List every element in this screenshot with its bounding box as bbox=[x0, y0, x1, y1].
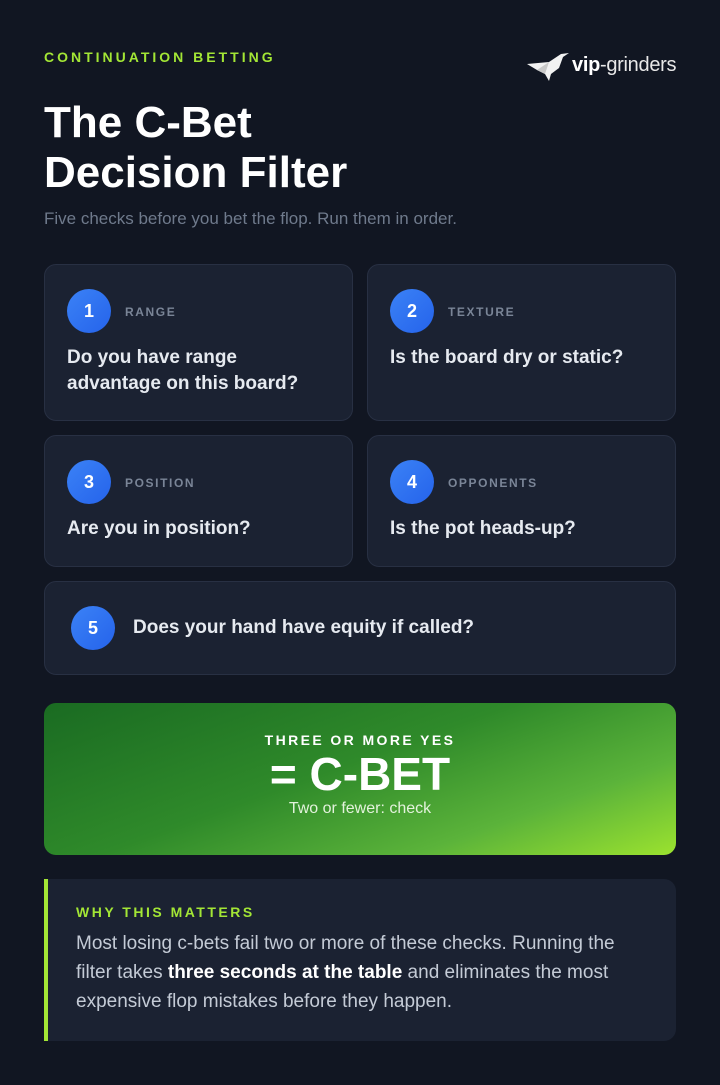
card 5: Does your hand have equity if called? bbox=[133, 617, 474, 638]
card 4: OPPONENTS bbox=[448, 476, 538, 490]
card 5 bbox=[44, 581, 676, 675]
card 1 bbox=[44, 264, 353, 421]
result banner: Two or fewer: check bbox=[289, 800, 431, 817]
result banner bbox=[44, 703, 676, 855]
card 5: 5 bbox=[88, 618, 98, 638]
card 4: 4 bbox=[407, 472, 417, 492]
why this matters callout bbox=[44, 879, 676, 1041]
card 3: POSITION bbox=[125, 476, 195, 490]
card 4: Is the pot heads-up? bbox=[390, 518, 576, 539]
logo: vip-grinders bbox=[572, 54, 676, 76]
card 2: TEXTURE bbox=[448, 305, 515, 319]
why this matters callout: WHY THIS MATTERS bbox=[76, 904, 255, 920]
why this matters callout: Most losing c-bets fail two or more of these checks. Running the filter takes three seconds at the table and eliminates the most expensive flop mistakes before they happen. bbox=[76, 933, 615, 1012]
title: The C-Bet bbox=[44, 98, 252, 147]
card 1: RANGE bbox=[125, 305, 176, 319]
card 2 bbox=[367, 264, 676, 421]
card 3: Are you in position? bbox=[67, 518, 251, 539]
card 2: Is the board dry or static? bbox=[390, 347, 623, 368]
logo bbox=[527, 53, 676, 81]
card 1: 1 bbox=[84, 301, 94, 321]
result banner: = C-BET bbox=[270, 748, 450, 800]
result banner: THREE OR MORE YES bbox=[265, 732, 455, 748]
card 1: advantage on this board? bbox=[67, 373, 298, 394]
card 3 bbox=[44, 435, 353, 567]
card 1: Do you have range bbox=[67, 347, 237, 368]
subtitle: Five checks before you bet the flop. Run them in order. bbox=[44, 209, 457, 228]
title: Decision Filter bbox=[44, 148, 347, 197]
card 4 bbox=[367, 435, 676, 567]
card 2: 2 bbox=[407, 301, 417, 321]
title bbox=[44, 98, 347, 197]
eyebrow label: CONTINUATION BETTING bbox=[44, 49, 276, 65]
card 3: 3 bbox=[84, 472, 94, 492]
